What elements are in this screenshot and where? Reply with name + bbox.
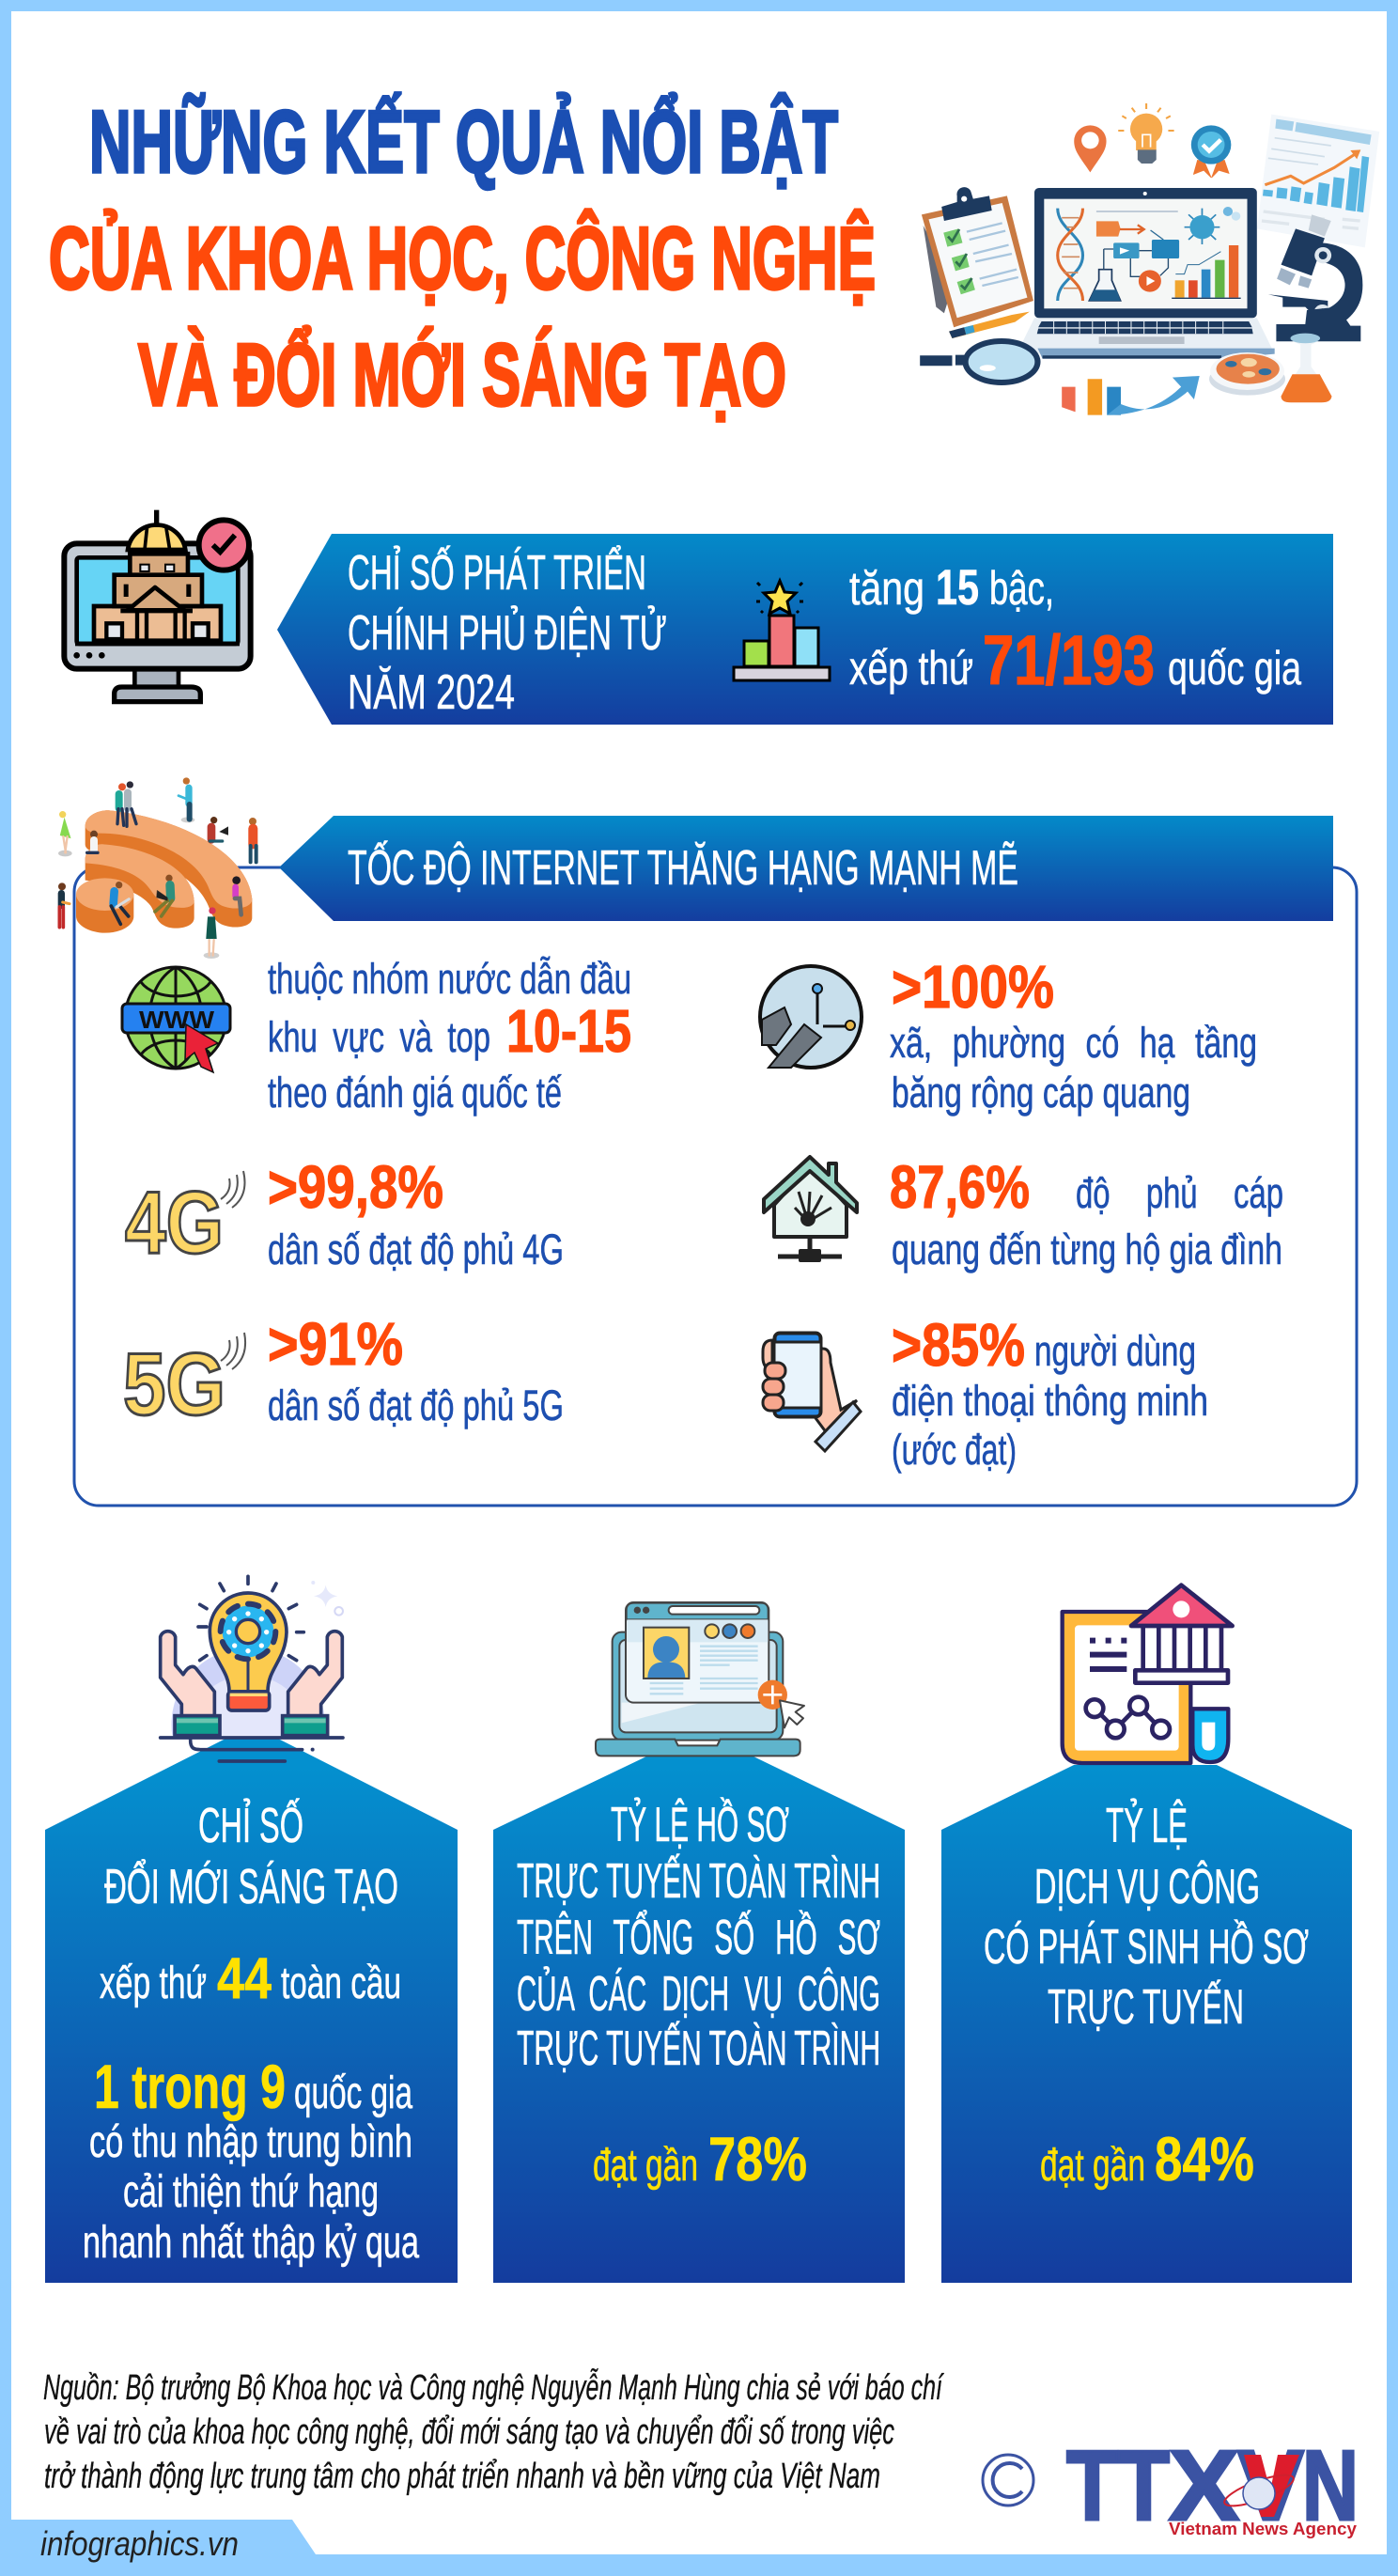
text: 4G coverage: dân số đạt độ phủ 4G [268, 1226, 564, 1273]
text: 84 percent [1040, 2124, 1254, 2194]
text: one of nine [83, 2052, 419, 2268]
text: 4G coverage [268, 1153, 564, 1273]
icon: globe www [122, 967, 230, 1072]
screen: bars [1172, 245, 1241, 298]
text: rank 71/193: xếp thứ [849, 642, 973, 695]
text: 78 percent: 78% [708, 2124, 807, 2194]
banner: internet speed [279, 816, 1333, 921]
heading: online dossier rate: CỦA CÁC DỊCH VỤ CÔNG [517, 1966, 880, 2022]
text: 4G coverage: >99,8% [268, 1153, 443, 1221]
icon: hand holding phone [763, 1333, 861, 1451]
icon: petri dish [1209, 352, 1285, 396]
text: rank up 15: 15 [936, 560, 979, 616]
logo: TTXVN: T [1118, 2430, 1170, 2541]
source note [43, 2366, 944, 2496]
text: smartphone users [892, 1311, 1208, 1474]
heading: online dossier rate: TỶ LỆ HỒ SƠ [611, 1797, 789, 1852]
icon: government monitor [64, 510, 251, 702]
text: household fiber: 87,6% [890, 1153, 1030, 1221]
item: fiber infrastructure [760, 953, 1257, 1116]
icon: light bulb [1118, 103, 1174, 164]
source note: Nguồn: Bộ trưởng Bộ Khoa học và Công nghệ Nguyễn Mạnh Hùng chia sẻ với báo chí [43, 2366, 944, 2408]
text: smartphone users: người dùng [1034, 1327, 1196, 1375]
text: 84 percent: 84% [1155, 2124, 1254, 2194]
item: 4G coverage [125, 1153, 564, 1273]
hero illustration: laptop and science icons [920, 103, 1379, 415]
source note: về vai trò của khoa học công nghệ, đổi mới sáng tạo và chuyển đổi số trong việc [44, 2412, 894, 2452]
icon: online profile laptop [596, 1602, 804, 1756]
heading: public service rate: TRỰC TUYẾN [1048, 1979, 1244, 2035]
panel: e-government banner [277, 534, 1333, 725]
icon: rising bars and arrow [1062, 376, 1200, 415]
text: fiber infrastructure [890, 953, 1257, 1116]
text: leading region group: thuộc nhóm nước dẫn đầu [268, 955, 631, 1003]
heading: e-government index [348, 545, 667, 720]
icon: clipboard [922, 187, 1033, 327]
source note: trở thành động lực trung tâm cho phát triển nhanh và bền vững của Việt Nam [44, 2457, 880, 2496]
title: NHỮNG KẾT QUẢ NỔI BẬT [89, 92, 838, 191]
item: household fiber [764, 1153, 1283, 1273]
item: 5G coverage [123, 1310, 564, 1433]
icon: 4G signal: 4G [125, 1173, 224, 1272]
text: smartphone users: >85% [892, 1311, 1025, 1379]
text: household fiber: độ phủ cáp [1076, 1169, 1283, 1217]
text: one of nine: quốc gia [294, 2069, 412, 2118]
heading: e-government index: CHỈ SỐ PHÁT TRIỂN [348, 545, 646, 601]
screen: virus [1185, 209, 1219, 244]
heading: public service rate [984, 1798, 1309, 2035]
text: one of nine: 1 trong 9 [94, 2052, 286, 2121]
text: one of nine: có thu nhập trung bình [89, 2117, 412, 2167]
title [49, 92, 876, 424]
heading: online dossier rate: TRỰC TUYẾN TOÀN TRÌNH [517, 1853, 880, 1909]
text: 5G coverage: >91% [268, 1310, 403, 1378]
card: innovation index [45, 1739, 458, 2283]
text: household fiber: quang đến từng hộ gia đình [892, 1226, 1282, 1273]
heading: innovation index: ĐỔI MỚI SÁNG TẠO [104, 1859, 398, 1914]
heading: e-government index: NĂM 2024 [348, 665, 515, 720]
logo: TTXVN: V [1237, 2430, 1304, 2541]
panel: internet speed box [74, 867, 1357, 1506]
card: online dossier rate [493, 1756, 905, 2283]
text: fiber infrastructure: xã, phường có hạ tầng [890, 1019, 1257, 1067]
text: 5G coverage [268, 1310, 564, 1429]
text: 78 percent: đạt gần [593, 2141, 698, 2191]
title: VÀ ĐỔI MỚI SÁNG TẠO [138, 325, 786, 424]
text: leading region group: 10-15 [506, 997, 631, 1065]
text: rank 71/193 [849, 621, 1301, 699]
icon: house with fiber [764, 1157, 857, 1260]
icon: government building document [1063, 1585, 1233, 1763]
text: rank 44: 44 [217, 1946, 272, 2011]
heading: innovation index [104, 1798, 398, 1914]
text: rank 44: xếp thứ [100, 1959, 207, 2008]
icon: magnifier [920, 341, 1037, 382]
text: fiber infrastructure: >100% [892, 953, 1054, 1021]
text: rank up 15: bậc, [989, 562, 1054, 615]
logo: TTXVN: X [1169, 2430, 1239, 2541]
item: leading region group [122, 955, 631, 1116]
text: leading region group: theo đánh giá quốc tế [268, 1069, 562, 1116]
icon: microscope [1268, 214, 1362, 341]
text: 84 percent: đạt gần [1040, 2141, 1145, 2191]
icon: pin [1074, 125, 1107, 172]
icon: wifi with people [58, 777, 256, 959]
text: rank 44 [100, 1946, 401, 2011]
text: 5G coverage: dân số đạt độ phủ 5G [268, 1382, 564, 1429]
people [58, 777, 256, 959]
icon: flask [1282, 334, 1331, 402]
heading: online dossier rate [517, 1797, 880, 2076]
site footer label: infographics.vn [40, 2524, 239, 2563]
heading: innovation index: CHỈ SỐ [198, 1798, 303, 1853]
heading: public service rate: DỊCH VỤ CÔNG [1034, 1860, 1260, 1914]
heading: public service rate: TỶ LỆ [1106, 1798, 1188, 1853]
title: CỦA KHOA HỌC, CÔNG NGHỆ [49, 209, 876, 307]
text: rank 71/193: quốc gia [1168, 642, 1301, 695]
item: smartphone users [763, 1311, 1208, 1474]
text: rank 44: toàn cầu [281, 1959, 401, 2008]
icon: fiber cable [760, 966, 862, 1068]
icon: podium and star [734, 581, 830, 680]
banner: internet speed: TỐC ĐỘ INTERNET THĂNG HẠNG MẠNH MẼ [348, 840, 1018, 896]
icon: badge [1191, 125, 1231, 178]
text: 78 percent [593, 2124, 807, 2194]
text: one of nine: nhanh nhất thập kỷ qua [83, 2218, 419, 2268]
text: fiber infrastructure: băng rộng cáp quang [892, 1069, 1190, 1116]
logo: TTXVN [1066, 2430, 1359, 2541]
icon: globe www: WWW [139, 1006, 214, 1034]
text: rank up 15: tăng [849, 562, 924, 615]
icon: laptop [1017, 188, 1275, 359]
heading: online dossier rate: TRỰC TUYẾN TOÀN TRÌNH [517, 2021, 880, 2076]
logo: TTXVN: T [1066, 2430, 1118, 2541]
text: rank up 15 [849, 560, 1054, 616]
card: public service rate [941, 1765, 1352, 2283]
heading: e-government index: CHÍNH PHỦ ĐIỆN TỬ [348, 605, 667, 661]
text: household fiber [890, 1153, 1283, 1273]
icon: pencil [949, 312, 1030, 338]
text: smartphone users: điện thoại thông minh [892, 1377, 1208, 1425]
text: one of nine: cải thiện thứ hạng [123, 2167, 379, 2217]
heading: online dossier rate: TRÊN TỔNG SỐ HỒ SƠ [517, 1910, 880, 1965]
icon: copyright [983, 2455, 1033, 2506]
logo: TTXVN: Vietnam News Agency [1169, 2519, 1358, 2538]
text: leading region group: khu vực và top [268, 1013, 490, 1061]
text: smartphone users: (ước đạt) [892, 1426, 1017, 1474]
text: leading region group [268, 955, 631, 1116]
icon: 5G signal: 5G [123, 1335, 225, 1433]
screen: DNA [1058, 209, 1082, 301]
icon: light bulb gear in hands [161, 1576, 343, 1761]
text: rank 71/193: 71/193 [983, 621, 1155, 699]
logo: TTXVN: N [1302, 2430, 1359, 2541]
